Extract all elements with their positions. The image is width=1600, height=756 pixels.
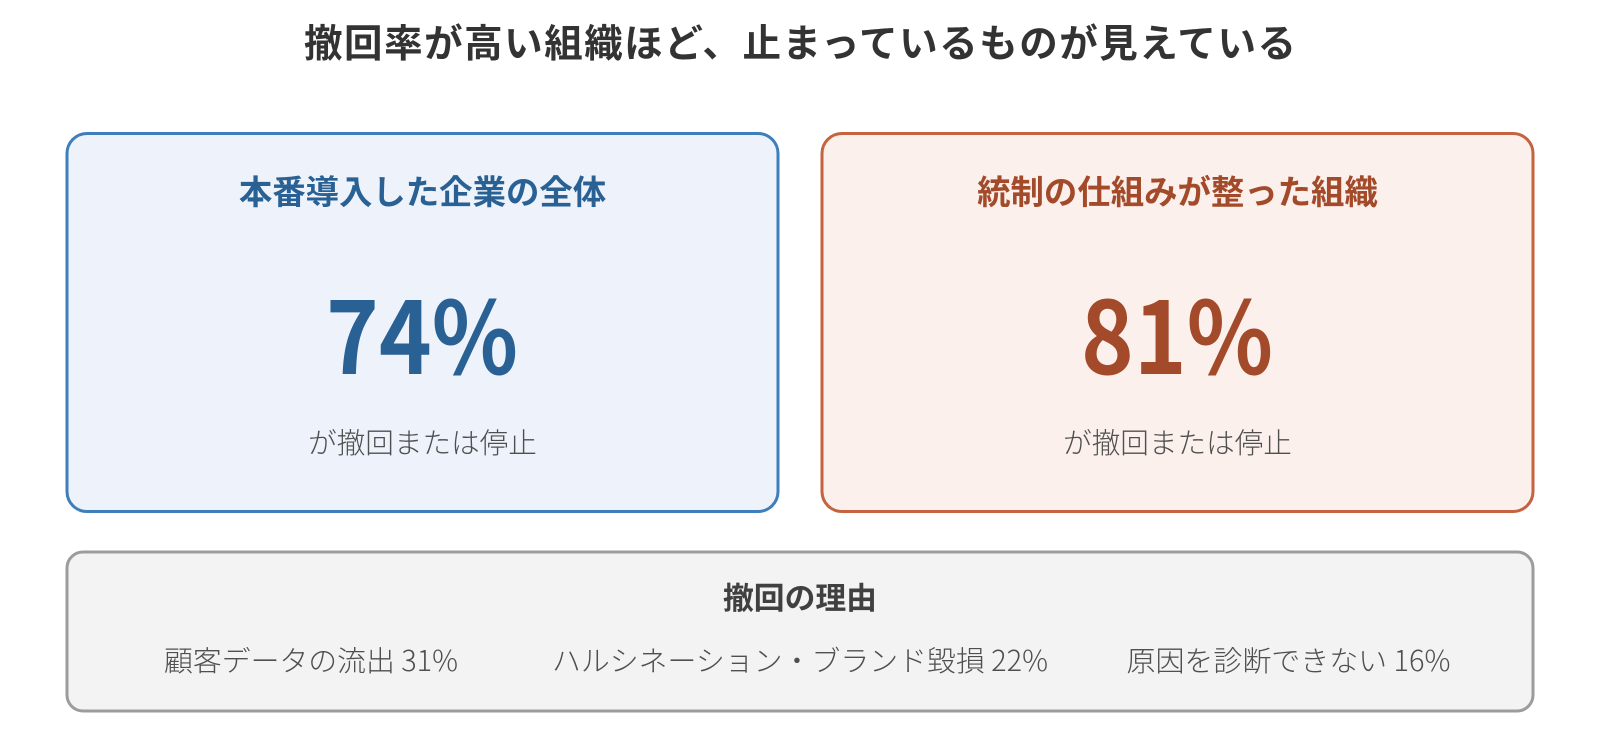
panel: all companies — [67, 134, 778, 512]
title: 撤回率が高い組織ほど、止まっているものが見えている — [304, 13, 1296, 69]
reason: customer data leak: 顧客データの流出 31% — [164, 639, 458, 680]
panel: governed organizations — [822, 134, 1533, 512]
reason: hallucination and brand damage: ハルシネーション・ブランド毀損 22% — [552, 639, 1048, 680]
stat caption: governed organizations: が撤回または停止 — [1063, 421, 1292, 462]
stat: 74%: 74% — [326, 258, 518, 403]
reason: cause cannot be diagnosed: 原因を診断できない 16% — [1126, 639, 1450, 680]
stat: 81%: 81% — [1081, 258, 1273, 403]
panel heading: governed organizations: 統制の仕組みが整った組織 — [977, 165, 1378, 214]
panel: withdrawal reasons — [67, 552, 1533, 711]
stat caption: all companies: が撤回または停止 — [308, 421, 537, 462]
reasons heading: 撤回の理由 — [723, 573, 877, 618]
panel heading: all companies: 本番導入した企業の全体 — [239, 165, 606, 214]
